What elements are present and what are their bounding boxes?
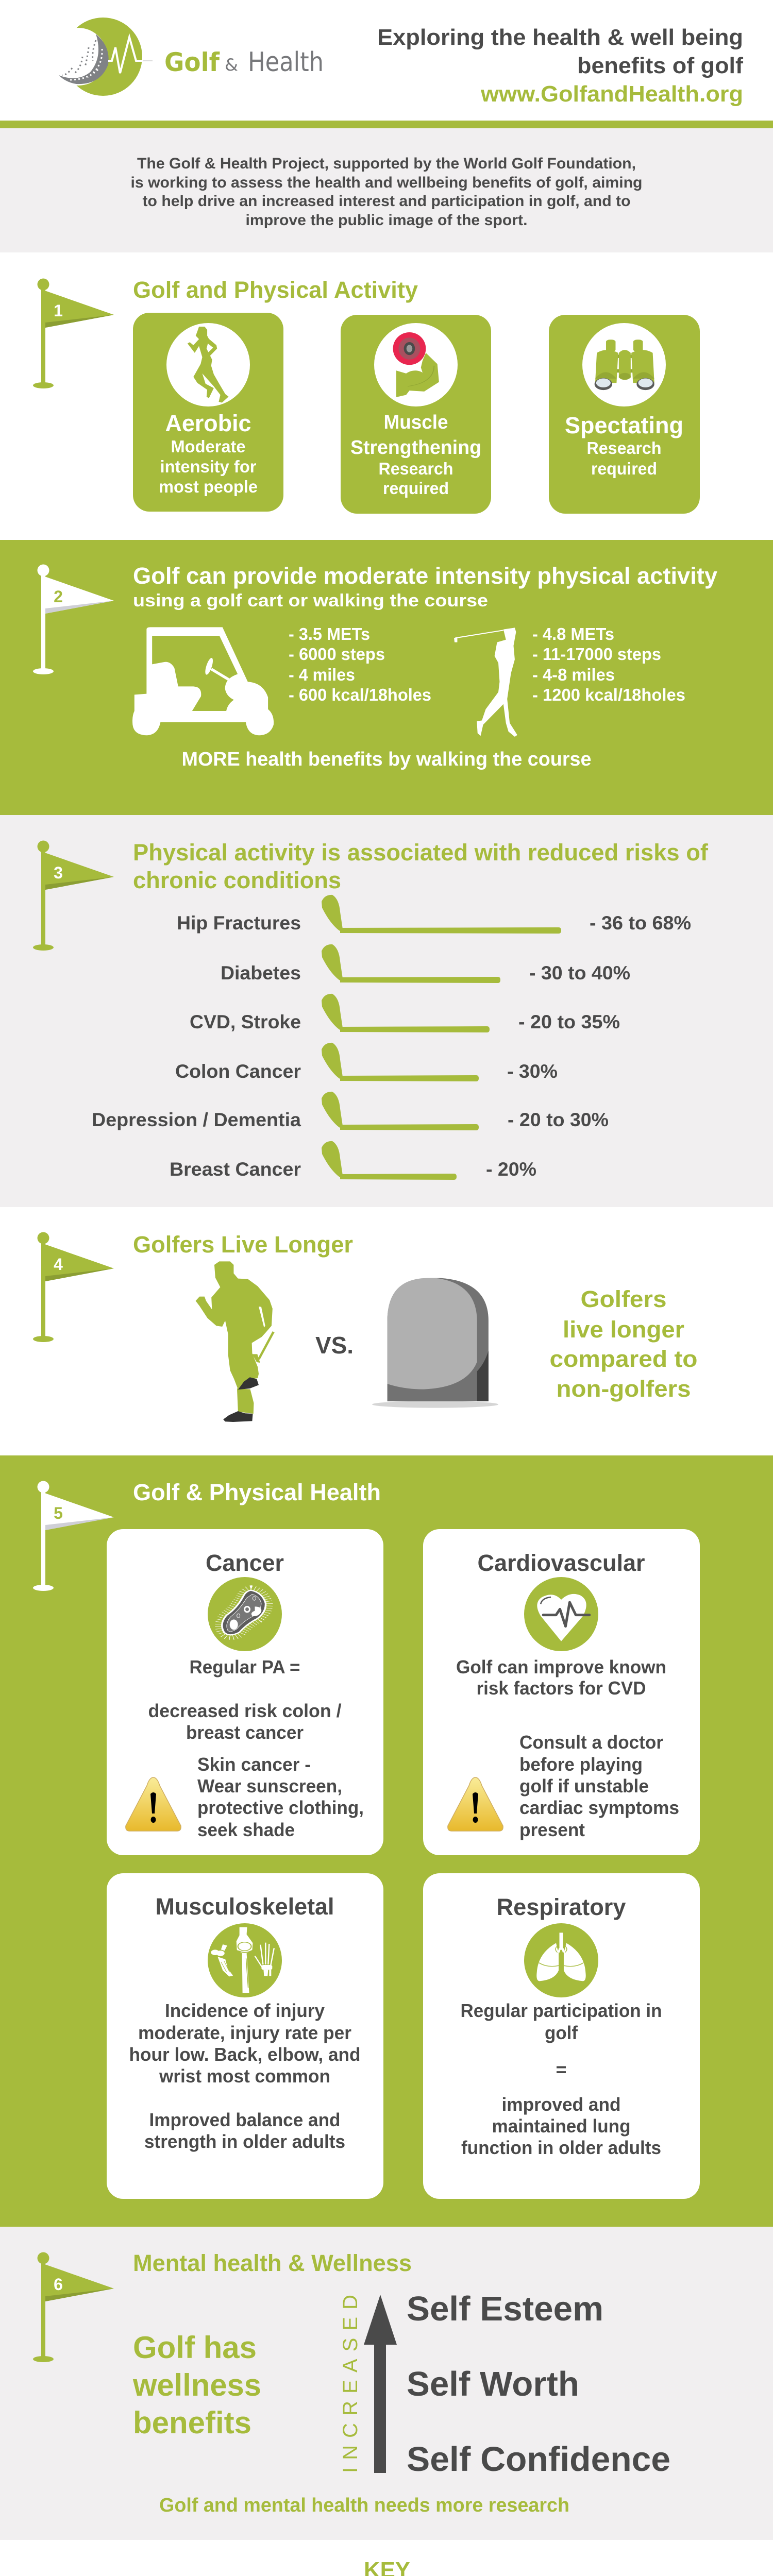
flag 6: [33, 2252, 114, 2362]
text: consult a doctor: Consult a doctor: [519, 1732, 663, 1753]
stats: walking: - 4-8 miles: [532, 665, 615, 684]
icon: heart with pulse: [537, 1594, 590, 1641]
flag 2: 2: [54, 587, 63, 606]
card: spectating: Spectating: [565, 412, 683, 438]
flag 3: 3: [54, 863, 63, 882]
card: aerobic: intensity for: [160, 457, 257, 476]
green divider: [0, 121, 773, 128]
card: respiratory: [423, 1873, 700, 2199]
heading: Golf and Physical Activity: [133, 277, 418, 303]
flag 6: 6: [54, 2275, 63, 2294]
panel: intro: is working to assess the health and wellbeing benefits of golf, aiming: [131, 174, 642, 191]
card: cancer: breast cancer: [186, 1722, 304, 1743]
text: wellness benefits: Golf has: [133, 2330, 257, 2365]
card: cardiovascular: risk factors for CVD: [476, 1677, 646, 1699]
panel: intro: improve the public image of the sport.: [245, 212, 528, 229]
panel: intro: to help drive an increased interest and participation in golf, and to: [142, 193, 631, 210]
text: consult a doctor: golf if unstable: [519, 1775, 649, 1797]
header logo: [49, 18, 324, 96]
row: breast cancer: [170, 1141, 536, 1180]
list: self measures: [407, 2290, 670, 2479]
card: musculoskeletal: Incidence of injury: [165, 2000, 325, 2021]
text block: golfers live longer: Golfers: [580, 1286, 667, 1312]
heading: Golf can provide moderate intensity physical activity: [133, 563, 717, 589]
flag 4: [33, 1232, 114, 1342]
text: consult a doctor: present: [519, 1819, 585, 1840]
chart: risk reduction golf clubs: [92, 895, 691, 1180]
text: wellness benefits: wellness: [132, 2368, 261, 2402]
card: muscle strengthening: [341, 315, 491, 514]
card: muscle strengthening: Research: [378, 459, 453, 478]
card: muscle strengthening: required: [383, 479, 449, 498]
flag 3: [33, 841, 114, 951]
icon: tombstone: [372, 1278, 498, 1408]
text block: golfers live longer: [549, 1286, 698, 1402]
icon: cancer cell: [220, 1588, 268, 1637]
card: muscle strengthening: Muscle: [383, 412, 448, 433]
panel: section 5 physical health: [0, 1455, 773, 2227]
flag 4: 4: [54, 1255, 63, 1274]
card: respiratory: function in older adults: [461, 2137, 661, 2158]
card: respiratory: =: [556, 2059, 567, 2080]
panel: section 2 moderate intensity: [0, 540, 773, 815]
card: respiratory: improved and: [502, 2094, 620, 2115]
heading: Golfers Live Longer: [133, 1231, 353, 1258]
stats: walking: - 11-17000 steps: [532, 645, 661, 664]
card: respiratory: golf: [545, 2022, 578, 2043]
row: depression dementia: - 20 to 30%: [508, 1109, 609, 1130]
panel: section 6 mental health: [0, 2227, 773, 2540]
card: respiratory: Respiratory: [497, 1894, 626, 1920]
card: cardiovascular: Golf can improve known: [456, 1656, 666, 1677]
card: muscle strengthening: Strengthening: [350, 437, 481, 459]
callout: Golf and mental health needs more research: [159, 2495, 569, 2516]
row: diabetes: Diabetes: [221, 962, 301, 984]
row: cvd stroke: [190, 994, 620, 1032]
text: skin cancer: protective clothing,: [197, 1797, 364, 1818]
flag 1: [33, 278, 114, 388]
flag 2: [33, 565, 114, 674]
row: cvd stroke: - 20 to 35%: [518, 1011, 620, 1032]
card: musculoskeletal: hour low. Back, elbow, and: [129, 2044, 361, 2065]
row: colon cancer: [175, 1043, 558, 1082]
card: aerobic: most people: [159, 477, 258, 496]
row: breast cancer: Breast Cancer: [170, 1159, 301, 1180]
row: depression dementia: Depression / Dementia: [92, 1109, 301, 1130]
icon: golfer walking: [196, 1261, 274, 1422]
icon: runner: [188, 327, 229, 402]
card: cancer: Cancer: [206, 1550, 284, 1576]
panel: intro: The Golf & Health Project, supported by the World Golf Foundation,: [137, 155, 636, 172]
card: musculoskeletal: strength in older adults: [144, 2131, 345, 2152]
header logo: &: [225, 55, 238, 75]
text: skin cancer: [197, 1754, 364, 1840]
icon: muscle and dumbbell: [393, 332, 439, 397]
callout: MORE health benefits by walking the course: [181, 749, 592, 770]
card: cancer: Regular PA =: [190, 1656, 300, 1677]
title: [377, 25, 743, 107]
card: aerobic: [133, 313, 283, 512]
text block: golfers live longer: live longer: [563, 1316, 684, 1343]
stats: walking: - 4.8 METs: [532, 624, 614, 643]
card: musculoskeletal: wrist most common: [159, 2065, 330, 2087]
heading: Physical activity is associated with reduced risks of: [133, 839, 709, 866]
text: skin cancer: Wear sunscreen,: [197, 1775, 342, 1797]
row: colon cancer: Colon Cancer: [175, 1061, 301, 1082]
label: increased: INCREASED: [339, 2295, 362, 2473]
row: diabetes: [221, 944, 630, 984]
heading: Mental health & Wellness: [133, 2250, 412, 2276]
icon: golf cart: [132, 627, 274, 735]
subheading: using a golf cart or walking the course: [133, 591, 488, 611]
text: consult a doctor: before playing: [519, 1754, 643, 1775]
panel: intro: [0, 128, 773, 252]
card: musculoskeletal: moderate, injury rate per: [138, 2022, 351, 2043]
flag 5: 5: [54, 1504, 63, 1522]
flag 5: [33, 1481, 114, 1591]
text block: golfers live longer: compared to: [549, 1346, 698, 1372]
row: hip fractures: - 36 to 68%: [590, 912, 691, 934]
card: spectating: required: [591, 459, 657, 478]
text: consult a doctor: cardiac symptoms: [519, 1797, 679, 1818]
title: Exploring the health & well being: [377, 25, 743, 50]
card: aerobic: Moderate: [171, 437, 245, 456]
row: colon cancer: - 30%: [507, 1061, 558, 1082]
icon: lungs: [536, 1933, 586, 1981]
arrow: upward: [364, 2295, 397, 2473]
row: diabetes: - 30 to 40%: [529, 962, 630, 984]
card: spectating: Research: [586, 438, 662, 457]
row: hip fractures: Hip Fractures: [177, 912, 301, 934]
heading: Golf & Physical Health: [133, 1479, 381, 1505]
text: consult a doctor: [519, 1732, 679, 1840]
list: self measures: Self Esteem: [407, 2290, 603, 2328]
row: depression dementia: [92, 1092, 609, 1130]
text block: golfers live longer: non-golfers: [557, 1376, 691, 1402]
row: cvd stroke: CVD, Stroke: [190, 1011, 301, 1032]
card: cancer: decreased risk colon /: [148, 1700, 341, 1721]
stats: walking: - 1200 kcal/18holes: [532, 685, 685, 704]
icon: warning: [448, 1777, 503, 1831]
stats: walking: [532, 624, 685, 704]
list: self measures: Self Confidence: [407, 2440, 670, 2479]
list: self measures: Self Worth: [407, 2365, 579, 2403]
header logo: Health: [248, 47, 324, 78]
icon: warning: [126, 1777, 181, 1831]
header logo: Golf: [164, 47, 220, 77]
icon: bones: [211, 1927, 274, 1993]
panel: section 1 physical activity: [33, 277, 700, 514]
card: cardiovascular: [423, 1529, 700, 1855]
text: skin cancer: seek shade: [197, 1819, 295, 1840]
card: respiratory: maintained lung: [492, 2115, 631, 2137]
icon: golfer swinging: [454, 628, 517, 737]
title: benefits of golf: [577, 53, 743, 78]
panel: section 4 golfers live longer: [33, 1231, 698, 1422]
card: cancer: [107, 1529, 383, 1855]
text: wellness benefits: benefits: [133, 2405, 251, 2440]
panel: section 3 reduced risks: [0, 815, 773, 1207]
card: cardiovascular: Cardiovascular: [477, 1550, 645, 1576]
stats: cart: - 3.5 METs: [289, 624, 370, 643]
stats: cart: [289, 624, 431, 704]
heading: chronic conditions: [133, 867, 341, 893]
vs label: VS.: [315, 1332, 354, 1359]
stats: cart: - 4 miles: [289, 665, 355, 684]
title: www.GolfandHealth.org: [480, 81, 743, 107]
text: wellness benefits: [132, 2330, 261, 2440]
flag 1: 1: [54, 301, 63, 320]
card: musculoskeletal: Musculoskeletal: [156, 1893, 334, 1920]
card: musculoskeletal: [107, 1873, 383, 2199]
row: hip fractures: [177, 895, 691, 934]
icon: binoculars: [595, 340, 654, 390]
card: aerobic: Aerobic: [165, 410, 251, 436]
stats: cart: - 600 kcal/18holes: [289, 685, 431, 704]
row: breast cancer: - 20%: [486, 1159, 536, 1180]
card: respiratory: Regular participation in: [461, 2000, 662, 2021]
card: spectating: [549, 315, 700, 514]
text: skin cancer: Skin cancer -: [197, 1754, 311, 1775]
stats: cart: - 6000 steps: [289, 645, 385, 664]
card: musculoskeletal: Improved balance and: [149, 2109, 340, 2130]
heading: [133, 839, 709, 893]
